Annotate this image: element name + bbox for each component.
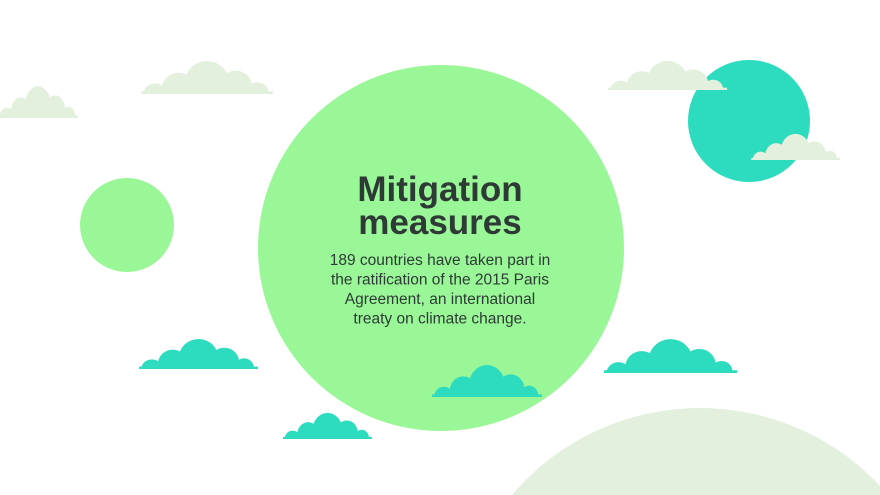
- small green circle left: [80, 178, 174, 272]
- cloud: teal bottom: [283, 413, 372, 449]
- cloud: light over teal circle: [751, 134, 840, 170]
- cloud: light top right: [608, 61, 727, 101]
- title: measures: [358, 203, 522, 242]
- cloud: light left: [0, 86, 78, 130]
- teal circle top right: [688, 60, 810, 182]
- big light circle bottom right: [453, 408, 880, 495]
- body text: 189 countries have taken part in: [330, 252, 550, 269]
- body text: treaty on climate change.: [353, 310, 527, 328]
- body text: [330, 252, 550, 328]
- title: [357, 170, 523, 242]
- cloud: teal right: [604, 339, 737, 386]
- main green circle: [258, 65, 624, 431]
- title: Mitigation: [357, 170, 523, 209]
- body text: Agreement, an international: [345, 291, 535, 308]
- cloud: light top: [141, 61, 273, 107]
- body text: the ratification of the 2015 Paris: [331, 272, 549, 288]
- cloud: teal left: [139, 339, 258, 381]
- cloud: teal center: [432, 365, 542, 409]
